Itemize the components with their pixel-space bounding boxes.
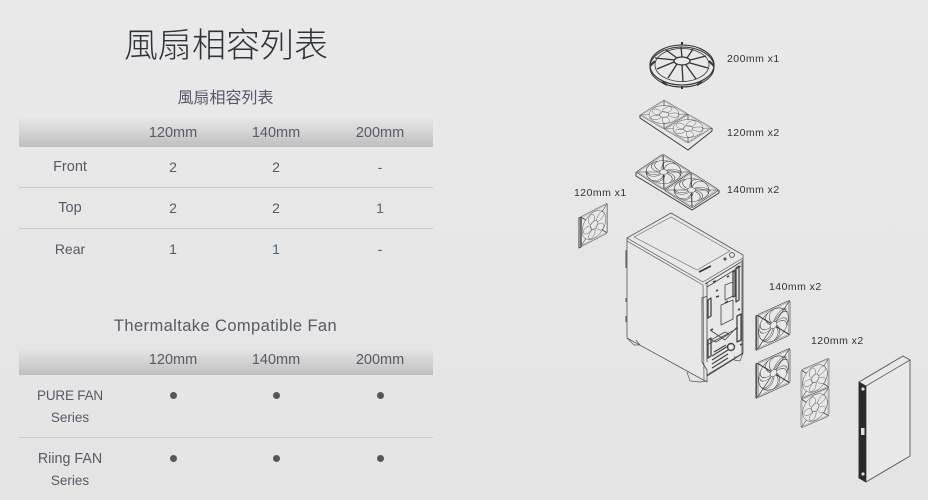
row: PURE FAN Series: [37, 388, 384, 425]
row: Rear: 1: [169, 241, 177, 257]
label: 120mm x2 side: 120mm x2: [811, 335, 864, 347]
row: Top: [58, 200, 384, 216]
table header row: [19, 347, 433, 375]
title: 風扇相容列表: [124, 27, 328, 65]
label: 120mm x2 top: 120mm x2: [727, 127, 780, 139]
row: Top: 1: [376, 200, 384, 216]
column heading 140mm: 140mm: [252, 352, 300, 368]
column heading 120mm: 120mm: [149, 125, 197, 141]
PC case: [626, 213, 743, 382]
row: Front: 2: [169, 159, 177, 175]
row: Rear: 1: [272, 241, 280, 257]
fans: 120mm x2 top: [640, 100, 712, 150]
row: Riing FAN Series: [38, 451, 384, 488]
row: Rear: -: [378, 241, 382, 257]
row: Riing FAN Series: Series: [51, 473, 89, 488]
row: Top: 2: [169, 200, 177, 216]
fans: 140mm x2 top: [636, 154, 719, 210]
column heading 120mm: 120mm: [149, 352, 197, 368]
column heading 140mm: 140mm: [252, 125, 300, 141]
row: Top: Top: [58, 200, 82, 216]
row: Rear: Rear: [55, 241, 85, 257]
fans: 120mm x2 side: [801, 358, 829, 428]
fan: 140mm rear lower: [756, 348, 790, 398]
row: Front: -: [378, 159, 382, 175]
row: Top: 2: [272, 200, 280, 216]
table: fan compatibility: [19, 89, 433, 257]
case interior: [702, 260, 742, 376]
table caption: 風扇相容列表: [177, 90, 274, 107]
column heading 200mm: 200mm: [356, 352, 404, 368]
row: PURE FAN Series: PURE FAN: [37, 388, 103, 403]
label: 120mm x1 rear: 120mm x1: [574, 187, 627, 199]
row: Rear: [55, 241, 382, 257]
label: 140mm x2 top: 140mm x2: [727, 184, 780, 196]
fan: 140mm rear upper: [756, 300, 790, 350]
table: Thermaltake compatible fan: [19, 317, 433, 488]
row: Front: Front: [53, 159, 87, 175]
fan: 120mm rear: [579, 203, 608, 248]
fan: 200mm top: [650, 42, 714, 89]
row: Front: 2: [272, 159, 280, 175]
front panel buttons: [699, 253, 734, 272]
row: PURE FAN Series: Series: [51, 410, 89, 425]
column heading 200mm: 200mm: [356, 125, 404, 141]
row: Front: [53, 159, 382, 175]
table header row: [19, 117, 433, 147]
table caption: Thermaltake Compatible Fan: [114, 317, 337, 335]
side panel: [859, 356, 910, 482]
label: 140mm x2 rear: 140mm x2: [769, 281, 822, 293]
row: Riing FAN Series: Riing FAN: [38, 451, 102, 467]
label: 200mm x1: 200mm x1: [727, 53, 780, 65]
